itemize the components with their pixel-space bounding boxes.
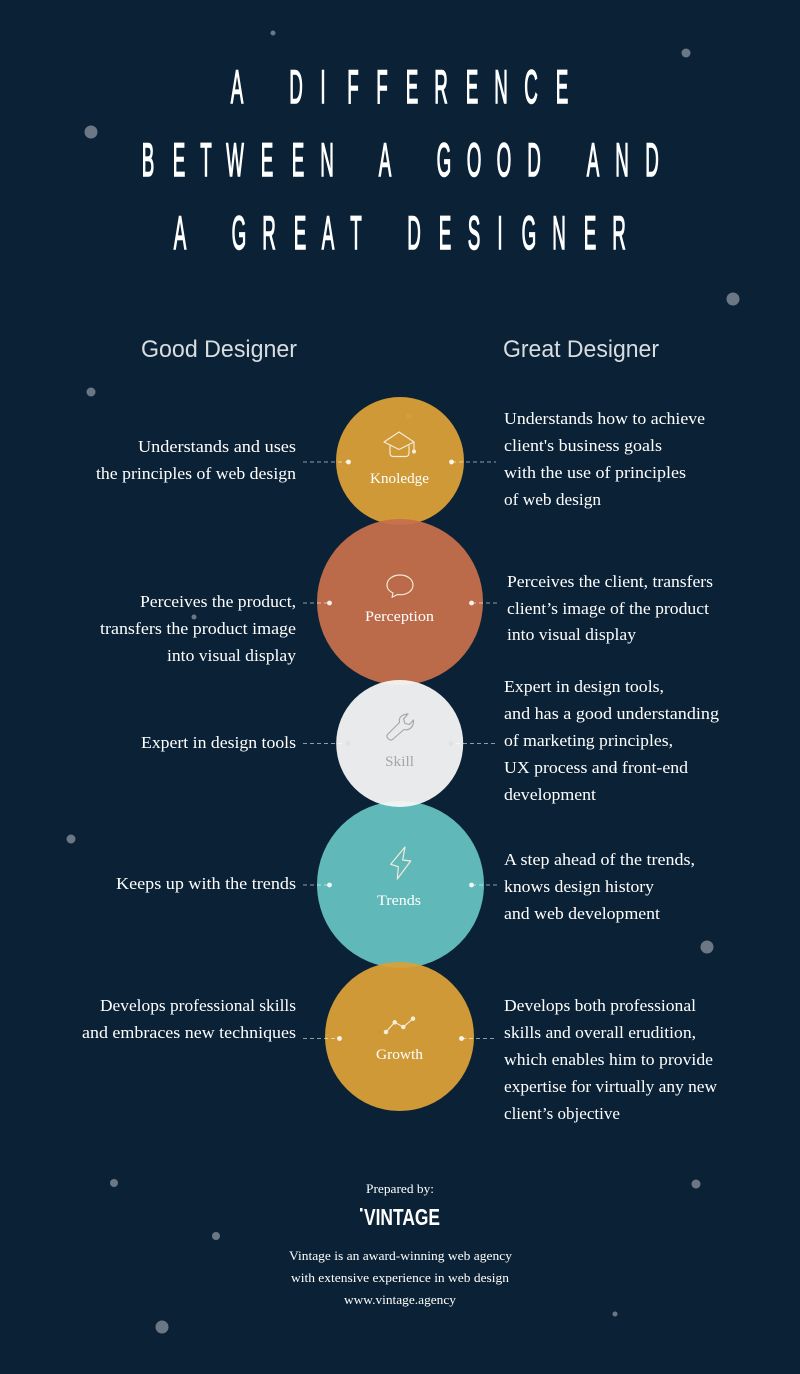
good designer text: perception: transfers the product image (100, 619, 296, 638)
label: perception: Perception (365, 609, 435, 625)
great designer text: perception: into visual display (507, 625, 637, 644)
great designer text: growth: expertise for virtually any new (504, 1077, 718, 1096)
good designer text: knowledge: the principles of web design (96, 464, 297, 483)
title: BETWEEN A GOOD AND (142, 134, 659, 187)
circle: trends (317, 801, 484, 968)
good designer text: skill: Expert in design tools (141, 733, 296, 752)
connectors: skill (303, 741, 495, 746)
connectors: trends (303, 883, 500, 887)
label: skill: Skill (385, 754, 414, 770)
great designer text: trends (504, 850, 695, 923)
great designer text: skill (504, 677, 720, 804)
great designer text: knowledge: with the use of principles (504, 463, 686, 482)
agency description: www.vintage.agency (344, 1292, 457, 1307)
great designer text: growth: skills and overall erudition, (504, 1023, 696, 1042)
great designer text: growth: which enables him to provide (504, 1050, 713, 1069)
good designer text: growth: Develops professional skills (100, 996, 296, 1015)
row: skill (141, 677, 720, 807)
great designer text: skill: UX process and front-end (504, 758, 689, 777)
great designer text: perception: client’s image of the product (507, 599, 709, 618)
icon: growth line chart (384, 1017, 415, 1034)
great designer text: skill: Expert in design tools, (504, 677, 664, 696)
agency description: Vintage is an award-winning web agency (289, 1248, 513, 1263)
label: knoledge: Knoledge (370, 471, 429, 487)
column heading: good designer: Good Designer (141, 336, 297, 363)
label: trends: Trends (377, 893, 421, 909)
circle: skill (336, 680, 463, 807)
great designer text: perception (507, 572, 713, 644)
great designer text: knowledge: of web design (504, 490, 602, 509)
circle: growth (325, 962, 474, 1111)
great designer text: trends: knows design history (504, 877, 655, 896)
title (142, 61, 659, 260)
great designer text: knowledge: Understands how to achieve (504, 409, 705, 428)
title: A GREAT DESIGNER (174, 207, 626, 260)
great designer text: trends: A step ahead of the trends, (504, 850, 695, 869)
label: growth: Growth (376, 1047, 424, 1063)
footer (289, 1181, 513, 1307)
good designer text: growth: and embraces new techniques (82, 1023, 296, 1042)
connectors: perception (303, 601, 497, 605)
title: A DIFFERENCE (231, 61, 568, 114)
circle: perception (317, 519, 483, 685)
prepared by label: Prepared by: (366, 1181, 434, 1196)
good designer text: perception: into visual display (167, 646, 297, 665)
good designer text: trends: Keeps up with the trends (116, 874, 296, 893)
great designer text: knowledge: client's business goals (504, 436, 662, 455)
icon: lightning bolt (391, 847, 411, 879)
connectors: growth (303, 1036, 497, 1041)
icon: wrench (387, 714, 414, 740)
row: growth (82, 962, 718, 1123)
background star dots (66, 30, 740, 1334)
logo: vintage: VINTAGE (364, 1204, 440, 1230)
great designer text: growth: client’s objective (504, 1104, 620, 1123)
good designer text: growth (82, 996, 296, 1042)
icon: speech bubble (387, 575, 413, 597)
great designer text: skill: development (504, 785, 596, 804)
agency description: with extensive experience in web design (291, 1270, 510, 1285)
good designer text: perception: Perceives the product, (140, 592, 296, 611)
column heading: great designer: Great Designer (503, 336, 659, 363)
circle: knowledge (336, 397, 464, 525)
connectors: knowledge (303, 460, 496, 464)
great designer text: growth: Develops both professional (504, 996, 696, 1015)
great designer text: growth (504, 996, 718, 1123)
row: knowledge (96, 397, 705, 525)
great designer text: trends: and web development (504, 904, 660, 923)
great designer text: skill: of marketing principles, (504, 731, 673, 750)
great designer text: knowledge (504, 409, 705, 509)
good designer text: knowledge (96, 437, 297, 483)
good designer text: knowledge: Understands and uses (138, 437, 296, 456)
great designer text: skill: and has a good understanding (504, 704, 720, 723)
agency description (289, 1248, 513, 1307)
row: perception (100, 519, 713, 685)
great designer text: perception: Perceives the client, transfers (507, 572, 713, 591)
icon: graduation cap (384, 432, 416, 456)
row: trends (116, 801, 695, 968)
good designer text: perception (100, 592, 297, 665)
